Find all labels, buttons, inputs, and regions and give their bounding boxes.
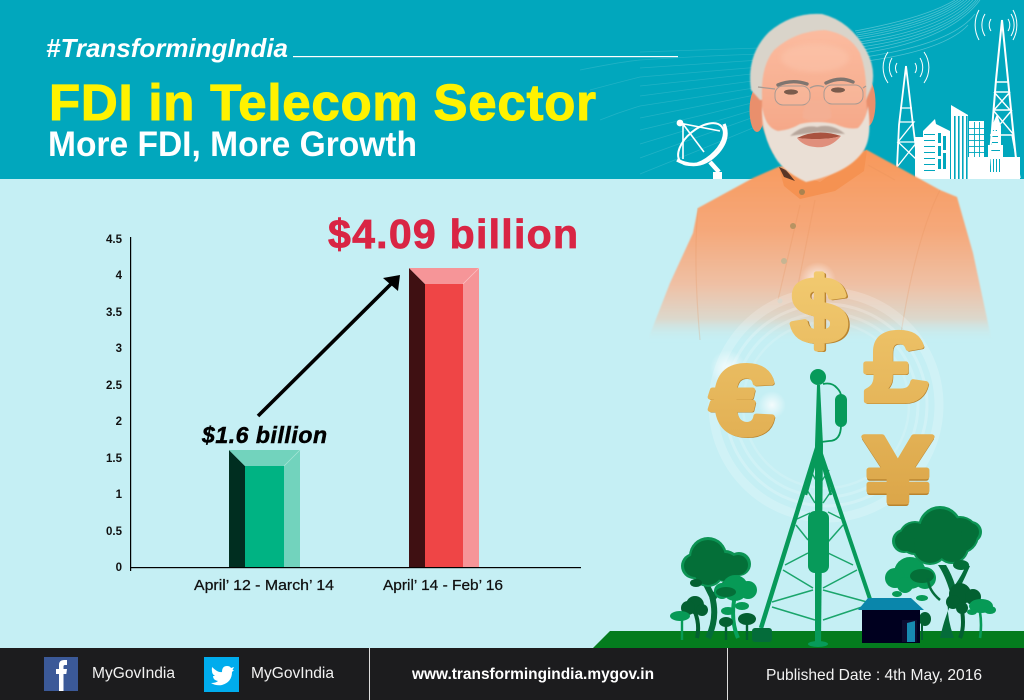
bar chart — [106, 234, 581, 594]
icon: yen symbol: ¥ — [864, 419, 932, 525]
chart: y axis tick labels: 4.5 — [106, 234, 123, 246]
chart: y axis tick labels: 2 — [116, 416, 122, 428]
portrait: neck shadow — [779, 167, 795, 181]
chart: x axis labels — [194, 578, 503, 594]
callout: 4.09 billion: $4.09 billion — [328, 211, 578, 257]
tree: big left — [681, 537, 751, 638]
portrait: nose — [803, 100, 831, 122]
tower: legs — [761, 445, 871, 628]
chart: y axis tick labels: 3 — [116, 343, 122, 355]
icon: dollar coin symbol: $ — [793, 261, 849, 363]
ground — [593, 631, 1024, 648]
icon: euro symbol: € — [710, 345, 774, 455]
icon: pound symbol: £ — [866, 313, 928, 423]
icon: city skyline — [915, 105, 1020, 179]
chart: axes — [130, 237, 581, 571]
footer bar — [0, 648, 1024, 700]
portrait: mouth — [797, 132, 841, 147]
signal rings — [713, 292, 939, 518]
equipment hut — [858, 598, 924, 643]
tower: top ball — [810, 369, 826, 385]
icon: facebook — [44, 657, 78, 691]
tower: central mast — [815, 385, 823, 645]
tree: small left cluster — [670, 579, 756, 640]
icon: pound symbol: £ — [865, 312, 927, 422]
tower: antenna pod and cable — [821, 384, 847, 442]
portrait: glasses — [758, 85, 866, 105]
tree: big right — [892, 506, 982, 638]
tree: light left — [714, 575, 757, 638]
icon: twitter — [204, 657, 239, 692]
icon: satellite dish — [671, 115, 731, 179]
heading rule — [293, 56, 678, 57]
tower: central cabinet — [808, 511, 829, 573]
chart: y axis tick labels: 4 — [116, 270, 123, 282]
trees right — [885, 506, 996, 640]
chart: y axis tick labels: 2.5 — [106, 380, 123, 392]
telecom tower — [752, 369, 871, 647]
header band — [0, 0, 1024, 179]
title: FDI in Telecom Sector — [49, 74, 596, 131]
portrait: eyes — [784, 87, 845, 95]
hut: door — [902, 620, 917, 642]
subtitle: More FDI, More Growth — [48, 125, 417, 164]
tree: small right cluster — [919, 583, 996, 640]
portrait: man in orange kurta — [647, 14, 992, 342]
tower: lattice braces — [772, 470, 867, 620]
hut: body — [862, 610, 920, 643]
chart: x axis labels: April’ 14 - Feb’ 16 — [383, 578, 503, 594]
portrait: forehead highlight — [781, 44, 849, 72]
icon: yen symbol: ¥ — [864, 417, 932, 523]
tower: base blocks — [752, 628, 828, 647]
portrait: kurta folds — [696, 165, 940, 340]
chart: green bar — [229, 450, 300, 567]
icon: dollar coin symbol: $ — [791, 260, 847, 362]
chart: y axis tick labels: 0.5 — [106, 526, 123, 538]
portrait: ears — [750, 80, 876, 132]
portrait: kurta — [647, 150, 992, 342]
chart: x axis labels: April’ 12 - March’ 14 — [194, 578, 334, 594]
hashtag heading: #TransformingIndia — [46, 33, 288, 63]
portrait: hair — [750, 14, 873, 100]
icon: euro symbol: € — [711, 346, 775, 456]
portrait: beard — [762, 106, 869, 182]
footer: website: www.transformingindia.mygov.in — [411, 666, 654, 683]
chart: y axis tick labels: 1.5 — [106, 453, 123, 465]
portrait: buttons — [778, 189, 805, 304]
callout: 1.6 billion: $1.6 billion — [201, 422, 327, 448]
arrow: growth — [258, 275, 400, 416]
portrait: collar — [779, 150, 867, 199]
footer: facebook handle: MyGovIndia — [92, 665, 175, 682]
trees left — [670, 537, 757, 640]
icon: large signal tower — [975, 10, 1020, 179]
chart: y axis tick labels: 3.5 — [106, 307, 123, 319]
footer: twitter handle: MyGovIndia — [251, 665, 334, 682]
portrait: eyebrows — [778, 79, 853, 85]
hut: roof — [858, 598, 924, 610]
footer: published date: Published Date : 4th May, 2016 — [766, 667, 982, 684]
chart: y axis tick labels: 0 — [116, 562, 122, 574]
portrait: face — [762, 30, 868, 180]
icon: small signal tower — [883, 52, 929, 173]
tree: light right — [885, 557, 936, 601]
portrait: moustache — [790, 126, 845, 136]
chart: y axis tick labels: 1 — [116, 489, 123, 501]
chart: y axis tick labels — [106, 234, 123, 574]
chart: red bar — [409, 268, 479, 567]
